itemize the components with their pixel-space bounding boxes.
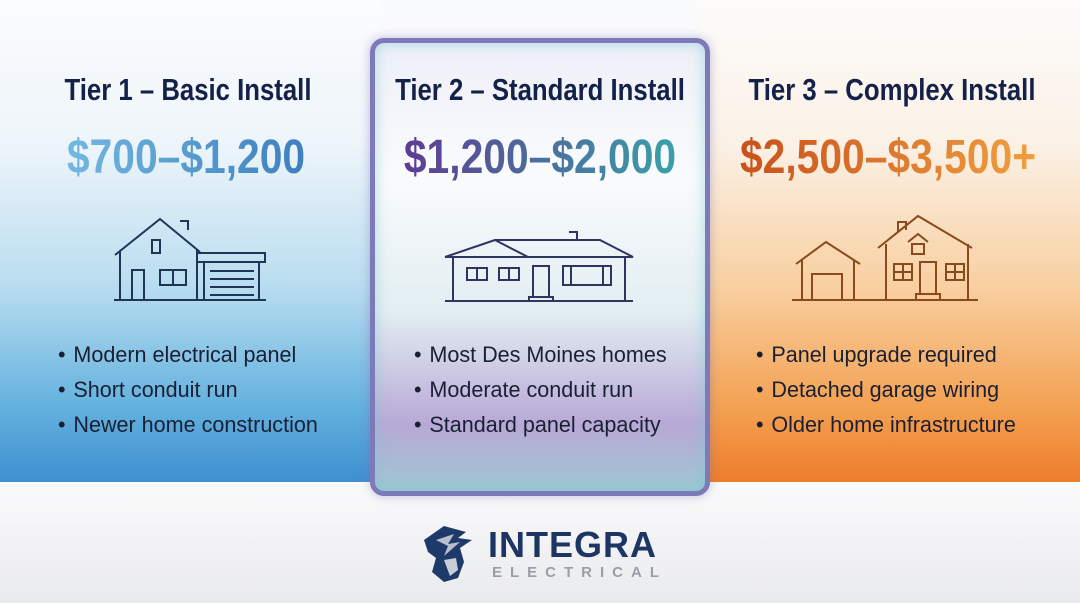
price: tier 1: $700–$1,200	[67, 131, 305, 184]
logo	[424, 524, 667, 582]
title: tier 3: Tier 3 – Complex Install	[749, 72, 1035, 107]
price: tier 3: $2,500–$3,500+	[740, 131, 1036, 184]
bullets: tier 1: Short conduit run	[73, 377, 238, 402]
bullets: tier 3: Panel upgrade required	[771, 342, 997, 367]
icon: tier 2 house	[444, 231, 634, 302]
bullets: tier 3: Older home infrastructure	[771, 412, 1016, 437]
text: INTEGRA: INTEGRA	[488, 524, 657, 565]
text: ELECTRICAL: ELECTRICAL	[492, 564, 667, 581]
price: tier 2: $1,200–$2,000	[404, 131, 676, 184]
icon: tier 3 houses	[792, 214, 978, 301]
icon: logo head	[424, 526, 472, 582]
bullets: tier 2: Moderate conduit run	[429, 377, 633, 402]
bullets: tier 3: Detached garage wiring	[771, 377, 999, 402]
bullets: tier 1	[58, 342, 318, 437]
bullets: tier 1: Newer home construction	[73, 412, 318, 437]
bullets: tier 2: Most Des Moines homes	[429, 342, 667, 367]
panel: tier 2 card	[370, 38, 710, 496]
icon: tier 1 house	[114, 218, 266, 301]
bullets: tier 3	[756, 342, 1016, 437]
bullets: tier 2: Standard panel capacity	[429, 412, 661, 437]
bullets: tier 2	[414, 342, 667, 437]
title: tier 1: Tier 1 – Basic Install	[65, 72, 311, 107]
title: tier 2: Tier 2 – Standard Install	[395, 72, 685, 107]
bullets: tier 1: Modern electrical panel	[73, 342, 296, 367]
